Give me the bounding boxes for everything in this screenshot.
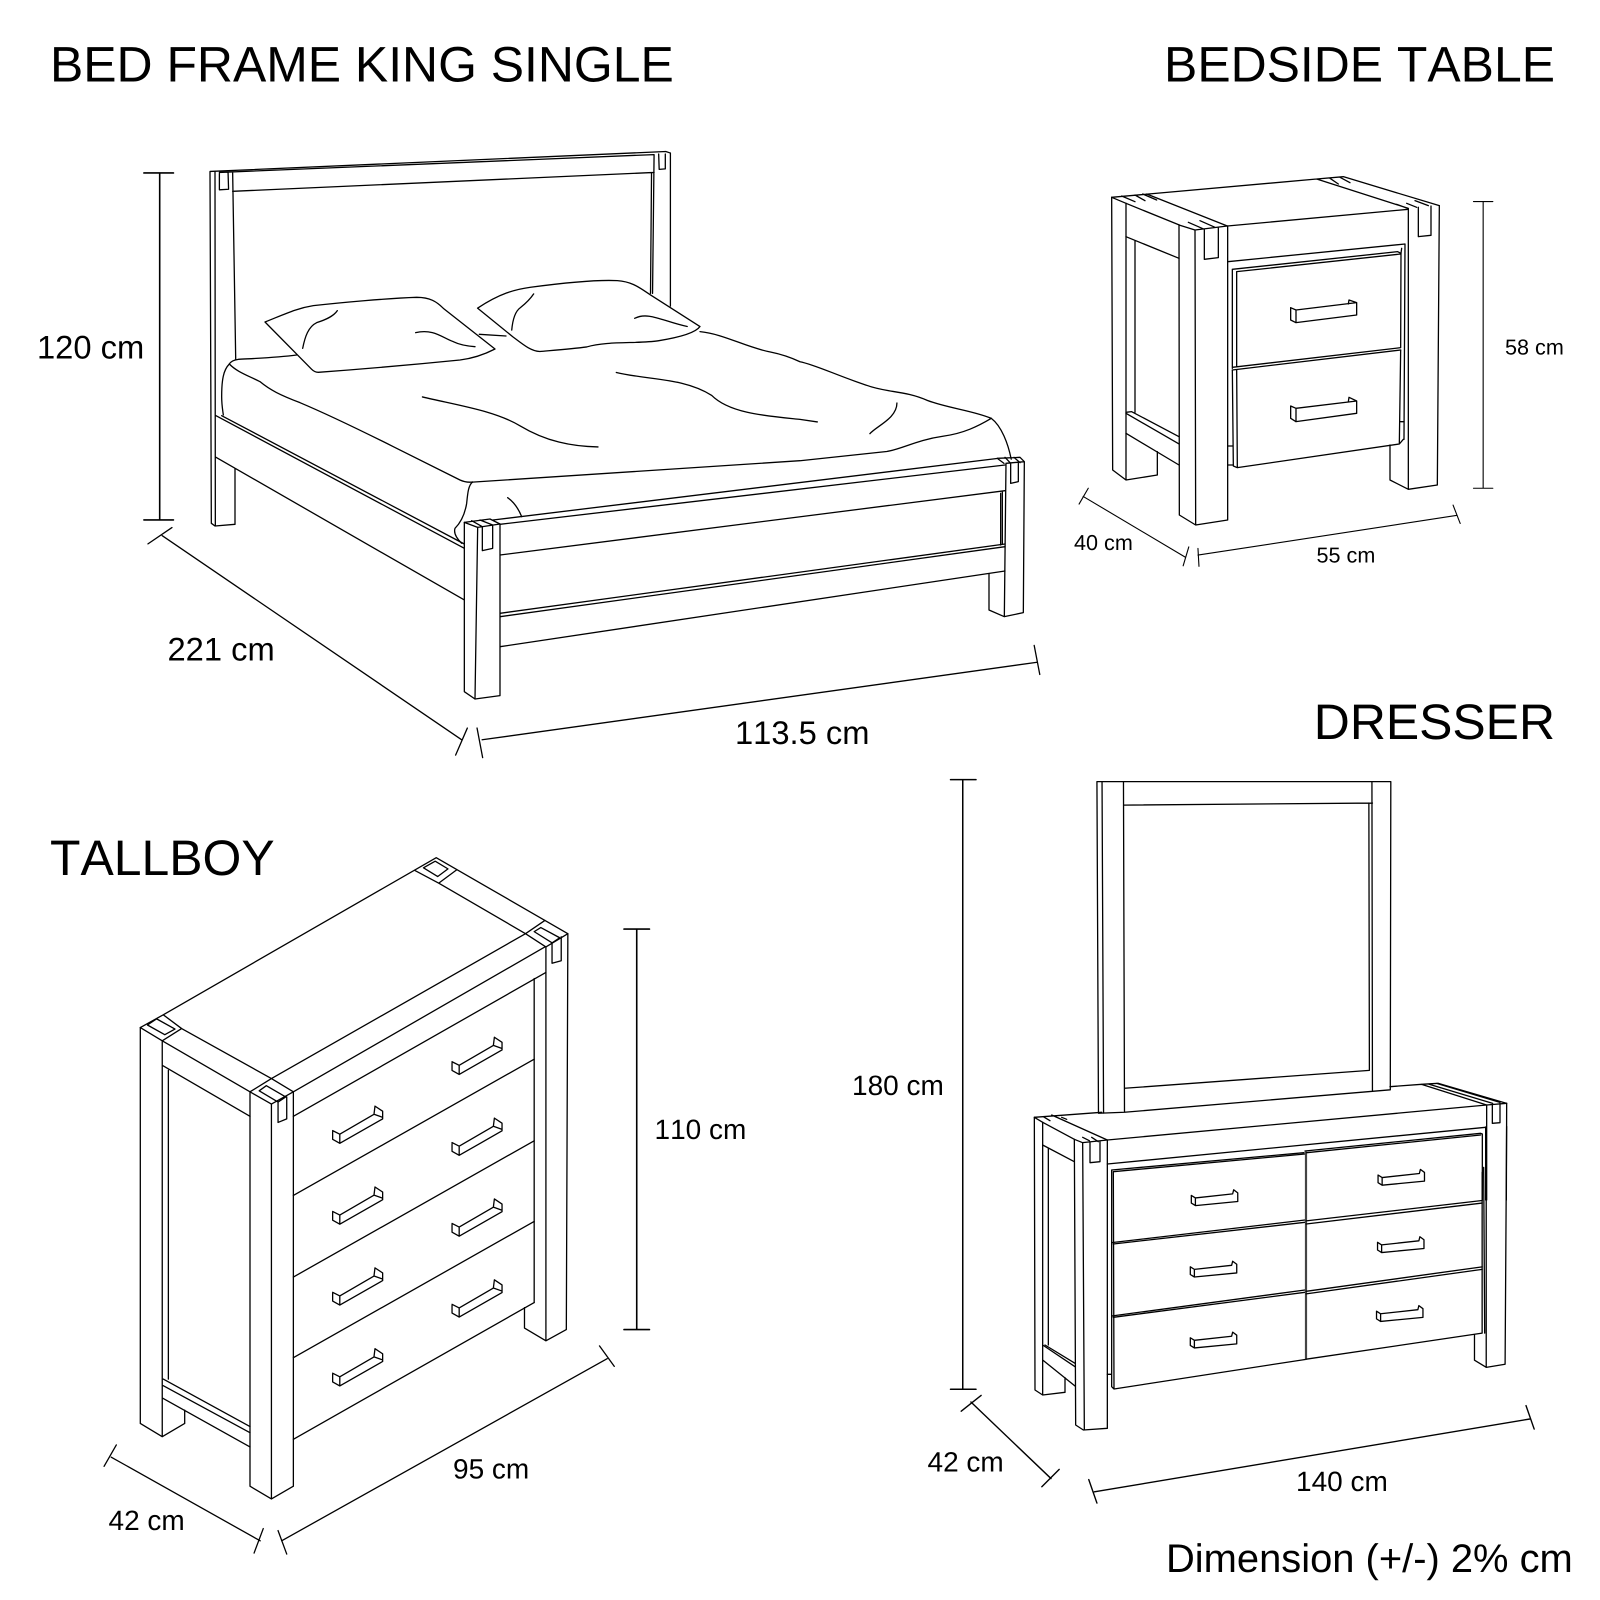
dimension: bedside depth [1079,488,1189,566]
dimension: tallboy width [278,1346,614,1554]
note: dimension tolerance: Dimension (+/-) 2% cm [1166,1537,1573,1581]
dresser handles [1190,1169,1424,1348]
dresser mirror [1097,782,1391,1113]
dimension: dresser width [1089,1406,1534,1503]
foot post right [989,457,1024,617]
title: bed frame king single: BED FRAME KING SINGLE [50,36,674,92]
dimension: bedside height [1473,202,1493,488]
dresser right section [1107,1083,1507,1200]
illustration: tallboy [140,858,568,1499]
tallboy handles [333,1106,383,1143]
bedside handle bottom [1291,397,1357,422]
label: 140 cm: 140 cm [1296,1466,1388,1497]
label: 40 cm: 40 cm [1074,530,1133,555]
pillow right [478,280,700,352]
label: 95 cm: 95 cm [453,1454,529,1484]
dimension: dresser depth [961,1395,1059,1487]
foot post left [464,498,522,699]
title: bedside table: BEDSIDE TABLE [1164,36,1555,92]
dimension: tallboy depth [104,1445,263,1553]
label: 221 cm: 221 cm [168,630,275,668]
label: 110 cm: 110 cm [654,1114,746,1145]
pillow left [265,297,506,372]
illustration: dresser with mirror [1034,782,1507,1430]
label: 180 cm: 180 cm [852,1070,944,1101]
dimension: bedside width [1198,505,1460,566]
tallboy right post [524,934,568,1341]
label: tallboy 42 cm: 42 cm [108,1505,185,1536]
title: tallboy: TALLBOY [50,830,275,886]
title: dresser: DRESSER [1314,694,1555,750]
tallboy rear left post and side panel [140,1028,250,1447]
tallboy top [140,858,568,1104]
label: 120 cm: 120 cm [37,328,144,366]
bedside drawer bottom [1228,350,1404,468]
dimension: dresser height [951,780,976,1389]
foot board [493,458,1005,647]
dimension: bed length [148,528,467,755]
illustration: bedside table [1112,177,1439,525]
dimension: tallboy height [624,929,649,1330]
label: 113.5 cm: 113.5 cm [735,714,869,751]
bedside drawer top [1232,252,1401,370]
label: 55 cm: 55 cm [1316,542,1375,568]
dimension: bed height [144,173,173,520]
label: 58 cm: 58 cm [1505,334,1564,360]
dimension: bed width [477,645,1040,758]
tallboy front post [250,1092,293,1499]
dresser left section [1034,1112,1306,1430]
illustration: bed frame [210,152,1024,699]
tallboy drawers [293,972,546,1439]
label: dresser 42 cm: 42 cm [928,1446,1004,1478]
bedside handle top [1291,300,1357,323]
